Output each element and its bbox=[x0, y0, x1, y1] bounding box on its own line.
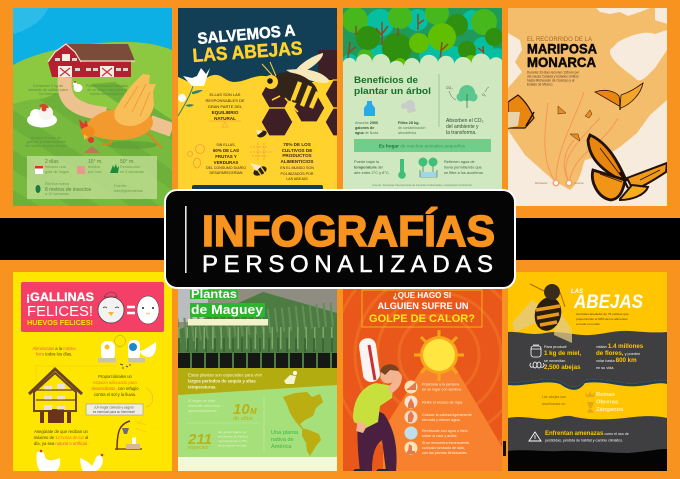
stats panel: 2 días bbox=[45, 159, 59, 165]
pink header: FELICES! bbox=[27, 303, 93, 320]
text: filter: de contaminación bbox=[398, 126, 425, 130]
text: origin: maravilla natural fue bbox=[188, 404, 220, 408]
text: flowers flight: en su vida. bbox=[596, 366, 614, 370]
stats panel: Infusión una bbox=[45, 165, 67, 169]
step text: Posicione a la persona bbox=[422, 382, 460, 386]
text: flowers flight: volar hasta 800 km bbox=[596, 357, 637, 364]
text: seventy percent of crops: 70% DE LOS bbox=[283, 142, 311, 147]
text: farm facts: los huevos bbox=[39, 92, 57, 96]
text: twelve hours light: Asegúrate de que reciban un bbox=[34, 429, 89, 434]
text: appropriate space: Proporciónales un bbox=[98, 374, 133, 379]
co2 tree icon: CO₂ bbox=[446, 86, 453, 90]
subtitle: PERSONALIZADAS bbox=[202, 251, 493, 278]
small bees bbox=[250, 130, 267, 176]
panel: maguey plants infographic bbox=[178, 272, 337, 471]
green highlight bar: Es hogar de muchos animales pequeños bbox=[379, 144, 466, 148]
heading: Beneficios de bbox=[354, 75, 418, 85]
stats panel: por mes bbox=[88, 170, 102, 174]
vertical rule bbox=[185, 206, 187, 273]
text: origin: El origen de esta bbox=[188, 399, 215, 403]
text: retain rain: Retienen agua de bbox=[444, 159, 475, 164]
photo of plants bbox=[178, 272, 337, 368]
step text: Colocar la cabeza ligeramente bbox=[422, 413, 472, 417]
stray black letter fragment bbox=[503, 441, 506, 456]
stats panel: Destrucción bbox=[120, 165, 140, 169]
dark wave bbox=[508, 331, 667, 387]
chick face bbox=[98, 292, 124, 323]
heading: plantar un árbol bbox=[354, 86, 431, 96]
title box: GOLPE DE CALOR? bbox=[369, 313, 475, 325]
text: genus: encuentran en México, bbox=[218, 434, 249, 438]
panel: bees infographic bbox=[508, 272, 667, 471]
text: sixty percent of fruits: FRUTAS Y bbox=[215, 154, 237, 159]
step text: con las piernas flexionadas. bbox=[422, 451, 468, 455]
smiling egg bbox=[137, 296, 159, 324]
text: lower temperature: Puede bajar la bbox=[354, 159, 380, 164]
text: intro bbox=[188, 372, 263, 390]
step text: colócalo tumbado de lado, bbox=[422, 446, 465, 450]
text: intro: en todo el mundo. bbox=[576, 322, 601, 326]
text: feeding bbox=[32, 346, 76, 356]
text: appropriate space bbox=[91, 374, 139, 397]
text: honey production: Para producir bbox=[544, 345, 568, 349]
text: intro: largos periodos de sequía y altas bbox=[188, 378, 256, 384]
stats panel: info@granofertas bbox=[114, 189, 143, 193]
thermometer icon bbox=[398, 159, 406, 179]
text: intro: Estas plantas son especiales para vivir bbox=[188, 372, 263, 378]
black footer bbox=[508, 449, 667, 471]
navy wave accent bbox=[508, 379, 667, 390]
small white chicken on path bbox=[73, 81, 82, 92]
title: SALVEMOS A bbox=[197, 22, 296, 48]
heading labels: Plantas bbox=[191, 287, 237, 301]
text: seventy percent of crops: CULTIVOS DE bbox=[282, 148, 312, 153]
calendar icon bbox=[35, 166, 43, 174]
text: farm facts: del huerto en poco tiempo bbox=[25, 144, 67, 148]
curved arrow bbox=[146, 388, 153, 407]
text: absorb co2: Absorben el CO₂ bbox=[446, 118, 484, 124]
text: filter: atmosférica bbox=[398, 131, 416, 135]
green highlight bar bbox=[354, 139, 491, 152]
text: threats: Enfrentan amenazas como el uso de bbox=[545, 431, 629, 437]
text: appropriate space: contra el sol y la lluvia. bbox=[94, 392, 136, 397]
text: appropriate space: desarrollarse, con refugio bbox=[91, 386, 139, 391]
stats panel: 50° m. bbox=[120, 159, 135, 165]
text: twelve hours light: día, ya sea natural o artificial. bbox=[34, 441, 88, 446]
trees and water icon bbox=[418, 158, 438, 177]
maroon top corner block bbox=[318, 50, 337, 80]
plant icon bbox=[110, 164, 119, 173]
text: origin: aproximadamente bbox=[188, 409, 217, 413]
text: lower temperature: aire entre 2°C y 8°C. bbox=[354, 170, 390, 175]
beetle icon bbox=[36, 185, 40, 193]
white flowers bbox=[178, 68, 210, 116]
text: appropriate space: espacio adecuado para bbox=[93, 380, 137, 385]
water bottle icon bbox=[364, 101, 375, 116]
caste icons bbox=[585, 391, 595, 413]
text: intro bbox=[527, 70, 580, 86]
source: Fuente: Sociedad Internacional de Ciencias Ambientales y Educación Ambiental bbox=[372, 183, 472, 187]
text: intro: Durante 33 días recorren 136 km por bbox=[527, 70, 580, 74]
stats panel: a 10 semanas bbox=[45, 192, 69, 196]
heading bbox=[527, 37, 597, 70]
migration end points bbox=[553, 180, 572, 186]
text: seventy percent of crops: POLINIZADOS POR bbox=[281, 172, 314, 176]
feeders icon bbox=[98, 336, 156, 368]
text: responsible for balance: NATURAL bbox=[214, 116, 236, 121]
hexagon honeycomb bbox=[262, 79, 337, 136]
stats panel: Fuente: bbox=[114, 184, 127, 188]
title box bbox=[362, 290, 482, 327]
stat: ten million: de años bbox=[233, 416, 253, 422]
route labels: Michoacán bbox=[535, 181, 548, 185]
text: sixty percent of fruits: VERDURAS bbox=[214, 160, 238, 165]
heading: MARIPOSA bbox=[527, 40, 597, 56]
text: filter: Filtra 28 kg. bbox=[398, 120, 420, 125]
light cone bbox=[383, 367, 502, 471]
text: seventy percent of crops: ALIMENTICIOS bbox=[281, 159, 313, 164]
panel: tree benefits infographic bbox=[343, 8, 502, 189]
text: sixty percent of fruits: 60% DE LAS bbox=[213, 148, 239, 153]
title: LAS bbox=[571, 289, 583, 295]
text: native plant: Una planta bbox=[271, 430, 299, 436]
butterfly top right bbox=[595, 83, 643, 110]
text: intro: controlan alrededor de 75 cultivos que bbox=[576, 312, 629, 316]
text: responsible for balance: RESPONSABLES DE bbox=[205, 98, 245, 103]
tree canopy bbox=[343, 8, 502, 66]
stat: ten million: M bbox=[250, 407, 257, 416]
title: LAS ABEJAS bbox=[192, 38, 303, 67]
box icon bbox=[77, 166, 85, 174]
text: lower temperature: temperatura del bbox=[354, 164, 383, 170]
text: intro: día causa Canadá y Estados Unidos bbox=[527, 74, 579, 78]
text: intro: proporcionan el 90% de los alimentos bbox=[576, 317, 628, 321]
text: water: agua de lluvia bbox=[355, 131, 379, 135]
text: retain rain: lluvia permitiendo que bbox=[444, 164, 482, 170]
navy footer bar bbox=[192, 185, 323, 189]
bee illustration bbox=[262, 53, 329, 112]
pink header bbox=[21, 282, 164, 332]
text: retain rain bbox=[444, 159, 483, 175]
white chickens bbox=[36, 450, 103, 471]
small butterflies bbox=[558, 106, 592, 141]
text: flowers flight bbox=[596, 343, 644, 370]
wooden coop bbox=[29, 369, 82, 423]
text: responsible for balance: ELLAS SON LAS bbox=[210, 92, 241, 97]
text: intro bbox=[576, 312, 629, 326]
text: origin bbox=[188, 399, 220, 413]
heading: MONARCA bbox=[527, 54, 596, 70]
stat: 211 species: 211 bbox=[187, 431, 212, 448]
text: water: Absorbe 2900 bbox=[355, 121, 378, 125]
text: twelve hours light: máximo de 12 horas de luz al bbox=[34, 435, 88, 440]
stat: ten million bbox=[233, 401, 257, 422]
step text: Refréscale con agua o hielo bbox=[422, 429, 468, 433]
pale footer bbox=[178, 457, 337, 471]
pink header: ¡GALLINAS bbox=[26, 290, 94, 304]
step text: sobre la cara y axilas. bbox=[422, 434, 458, 438]
stats panel bbox=[27, 156, 157, 199]
sand path bbox=[64, 77, 172, 130]
text: castes: Zánganos bbox=[596, 407, 623, 413]
text: honey production: 1 kg de miel, bbox=[544, 350, 581, 357]
text: classification: Las abejas son bbox=[542, 395, 566, 399]
text: genus: de la especie en total. bbox=[218, 444, 247, 448]
text: farm facts bbox=[25, 84, 128, 148]
man with heatstroke bbox=[353, 364, 402, 471]
step text: Si se encuentra inconsciente, bbox=[422, 441, 470, 445]
title box: ¿QUE HAGO SI bbox=[393, 291, 451, 300]
text: water: galones de bbox=[355, 126, 374, 130]
main title: INFOGRAFÍAS bbox=[202, 206, 495, 256]
text: honey production: se necesitan bbox=[544, 359, 565, 363]
lamp icon bbox=[115, 419, 146, 450]
panel: save the bees infographic bbox=[178, 8, 337, 189]
text: seventy percent of crops bbox=[280, 142, 314, 181]
text: threats: pesticidas, pérdida de hábitat y cambio climático. bbox=[545, 438, 623, 442]
panel: happy hens infographic bbox=[13, 272, 172, 471]
text: sixty percent of fruits bbox=[206, 143, 246, 175]
step text: elevada y ofrecer agua. bbox=[422, 418, 461, 422]
title bbox=[193, 24, 302, 62]
heading: EL RECORRIDO DE LA bbox=[527, 37, 592, 43]
text: native plant bbox=[271, 430, 299, 450]
olive band bbox=[178, 368, 337, 395]
text: seventy percent of crops: LAS ABEJAS bbox=[286, 177, 308, 181]
pink header: HUEVOS FELICES! bbox=[27, 318, 93, 327]
stats panel: tenidos bbox=[88, 165, 100, 169]
large orange chicken bbox=[79, 74, 162, 149]
text: classification: clasificadas en: bbox=[542, 402, 566, 406]
map shapes bbox=[508, 8, 667, 206]
text: genus bbox=[218, 430, 249, 448]
text: farm facts: gallinas y enfermedades bbox=[27, 140, 66, 144]
large monarch butterfly bbox=[588, 135, 667, 200]
text: classification bbox=[542, 395, 566, 406]
text: responsible for balance: EQUILIBRIO bbox=[212, 110, 239, 115]
text: water bbox=[355, 121, 379, 135]
butterfly left bbox=[508, 95, 534, 128]
text: honey production bbox=[544, 345, 581, 371]
sun bbox=[414, 330, 464, 381]
stat: ten million: 10 bbox=[233, 401, 250, 418]
panel: chicken farm infographic bbox=[13, 8, 172, 206]
text: sixty percent of fruits: DEL CONSUMO DIARIO bbox=[206, 166, 246, 170]
title badge bbox=[165, 190, 515, 288]
balance icon bbox=[209, 121, 241, 127]
step text bbox=[422, 382, 472, 455]
fruit line icons bbox=[188, 143, 272, 168]
step text: en un lugar con sombra. bbox=[422, 388, 462, 392]
heading labels: de Maguey bbox=[191, 302, 264, 317]
white hen sitting bbox=[27, 104, 57, 128]
text: farm facts: huerto sin fumigación bbox=[90, 92, 124, 96]
red barn bbox=[48, 44, 135, 77]
text: sixty percent of fruits: DESAPARECERÍAN bbox=[210, 171, 243, 175]
route labels: Ocampo bbox=[574, 181, 584, 185]
thermometer bbox=[358, 337, 381, 383]
heading bbox=[354, 75, 431, 96]
step text: Retire el exceso de ropa. bbox=[422, 400, 463, 404]
hand plant icon bbox=[284, 371, 297, 384]
divider bbox=[438, 74, 440, 127]
stats panel: 8 metros de insectos bbox=[45, 187, 92, 193]
text: castes bbox=[596, 392, 623, 413]
text box: safe home: es esencial para su bienestar! bbox=[93, 410, 135, 414]
jar and bee icons bbox=[530, 345, 544, 368]
text: retain rain: se filtre a los acuíferos bbox=[444, 170, 483, 175]
stats panel: 15° m. bbox=[88, 159, 103, 165]
text: feeding: hora todos los días. bbox=[36, 352, 72, 356]
text: seventy percent of crops: PRODUCTOS bbox=[282, 153, 312, 158]
text: genus: representando el 75% bbox=[218, 439, 248, 443]
step icons bbox=[404, 380, 418, 454]
text: farm facts: Consumen 3 kg de bbox=[33, 84, 63, 88]
text: native plant: nativa de bbox=[271, 437, 294, 443]
stat: 211 species: especies bbox=[188, 445, 209, 451]
co2 tree icon bbox=[446, 85, 489, 108]
text: flowers flight: de flores, y pueden bbox=[596, 350, 640, 357]
map of america bbox=[283, 392, 323, 456]
text: genus: del género Agave, se bbox=[218, 430, 247, 434]
text: absorb co2: del ambiente y bbox=[446, 124, 479, 130]
text: farm facts: Pueden consumir semillas bbox=[86, 84, 128, 88]
text: flowers flight: visitan 1.4 millones bbox=[596, 343, 644, 350]
text: absorb co2: la transforma. bbox=[446, 130, 477, 136]
text: intro: Estado de México. bbox=[527, 82, 553, 86]
text: filter bbox=[398, 122, 426, 134]
title: ABEJAS bbox=[573, 292, 643, 313]
text: feeding: Aliméntalas a la misma bbox=[32, 346, 76, 351]
panel: monarch butterfly infographic bbox=[508, 8, 667, 206]
text: threats bbox=[545, 431, 629, 442]
co2 tree icon: O₂ bbox=[482, 93, 487, 97]
black horizontal band bbox=[0, 218, 680, 260]
text: intro: temperaturas. bbox=[188, 384, 216, 390]
migration routes bbox=[545, 92, 618, 183]
text: intro: hasta Michoacán de Ocampo y al bbox=[527, 78, 575, 82]
route labels bbox=[535, 181, 584, 185]
heading labels bbox=[188, 287, 268, 326]
stats panel: en 3 semanas bbox=[120, 170, 144, 174]
text: farm facts: de un mejor valor para el bbox=[87, 88, 127, 92]
text: native plant: América bbox=[271, 444, 292, 450]
text: farm facts: alimento de calidad para bbox=[28, 88, 68, 92]
text: farm facts: Aunque el ruido de bbox=[31, 136, 61, 140]
bee photo bbox=[512, 284, 572, 343]
text: castes: Reinas bbox=[596, 392, 615, 398]
text box: safe home: ¡Un hogar cómodo y seguro bbox=[94, 406, 134, 410]
text: twelve hours light bbox=[34, 429, 89, 446]
text box: safe home bbox=[86, 404, 143, 415]
equals sign bbox=[127, 307, 135, 313]
text: responsible for balance: GRAN PARTE DEL bbox=[208, 104, 243, 109]
stats panel: Elimina nueva bbox=[45, 182, 70, 186]
panel: heat stroke infographic bbox=[333, 249, 545, 471]
text: seventy percent of crops: EN EL MUNDO SON bbox=[280, 166, 314, 170]
lower dark wave bbox=[508, 416, 667, 471]
text: responsible for balance bbox=[205, 92, 245, 121]
text: sixty percent of fruits: SIN ELLAS, bbox=[216, 143, 236, 147]
coop outline line bbox=[36, 366, 115, 380]
text: lower temperature bbox=[354, 160, 390, 175]
title box: ALGUIEN SUFRE UN bbox=[378, 301, 468, 311]
text: castes: Obreras bbox=[596, 400, 618, 406]
stats panel: gota de hogas bbox=[45, 170, 69, 174]
warning icon bbox=[529, 432, 541, 441]
text: honey production: 2,500 abejas bbox=[544, 364, 581, 371]
pollution cloud icon bbox=[401, 100, 416, 113]
text: absorb co2 bbox=[446, 118, 484, 134]
worm on mound bbox=[84, 146, 100, 153]
lime panel bbox=[178, 385, 337, 457]
